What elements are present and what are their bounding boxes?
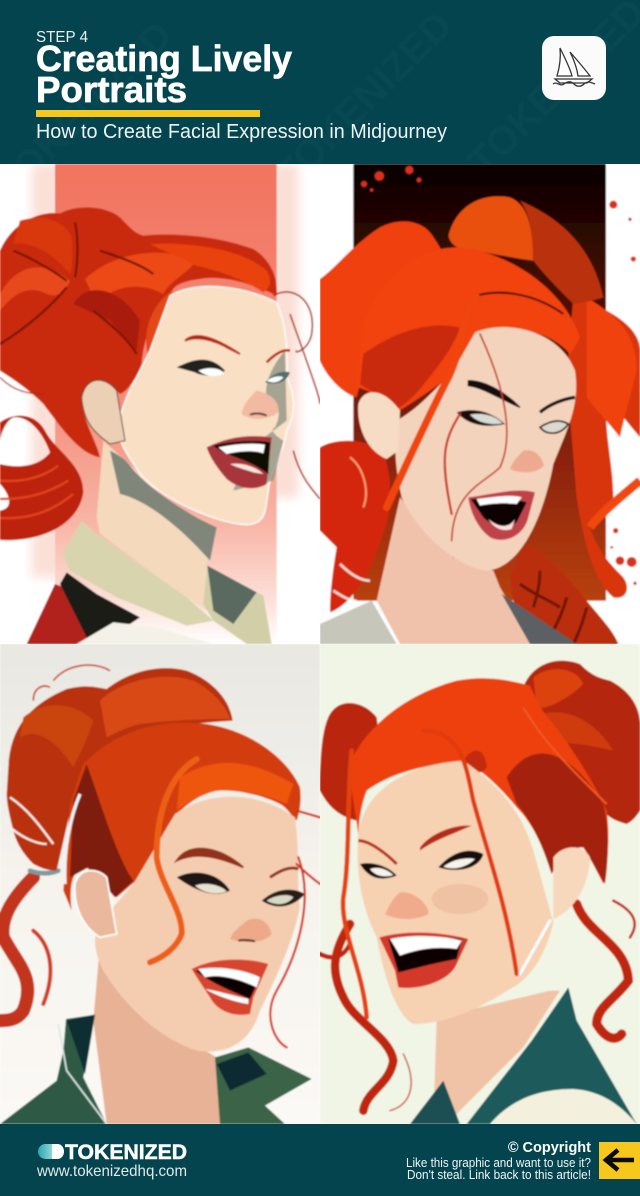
hair strands [343, 731, 550, 1017]
subtitle: How to Create Facial Expression in Midjourney [36, 121, 447, 143]
face features: brows, eyes, nose, mouth [177, 849, 305, 1015]
neck [433, 991, 560, 1124]
ear [75, 871, 117, 937]
hair buns [320, 661, 640, 824]
back hair bun [0, 207, 320, 501]
portrait panel: top-right, orange hair on dark panel [320, 164, 640, 644]
face [117, 286, 294, 525]
face [358, 761, 553, 1024]
copyright notice: Don't steal. Link back to this article! [407, 1168, 591, 1182]
face [395, 327, 576, 571]
icon: Midjourney sailboat tile [542, 36, 606, 100]
curls [320, 901, 635, 1111]
main hair [62, 722, 302, 910]
title [36, 38, 292, 110]
copyright notice: Like this graphic and want to use it? [406, 1156, 591, 1170]
portrait panel: top-left, profile with red bun on salmon band [0, 164, 320, 644]
neck and shirt [320, 497, 577, 644]
main hair [348, 678, 608, 884]
neck [92, 960, 221, 1124]
website url: www.tokenizedhq.com [36, 1163, 187, 1180]
hair buns [7, 665, 233, 871]
title: Portraits [36, 69, 187, 110]
ear [358, 392, 400, 459]
footer band [0, 1124, 640, 1196]
step label: STEP 4 [36, 29, 88, 46]
ponytail strand [0, 871, 58, 1021]
header watermark: TOKENIZED [267, 3, 461, 197]
Tokenized logo: TOKENIZED [65, 1141, 187, 1164]
copyright notice: © Copyright [508, 1140, 591, 1156]
face features: brows, eyes, nose, freckles, mouth [358, 825, 488, 988]
hair loop ponytail [0, 377, 83, 540]
hair strands [150, 759, 320, 1047]
face [95, 797, 300, 1052]
portrait panel: bottom-left, bun and green collar [0, 644, 320, 1124]
title: Creating Lively [36, 38, 292, 79]
neck [97, 441, 217, 611]
face features: brows, eyes, nose, mouth [457, 381, 575, 540]
header band [0, 0, 640, 164]
teal jacket and white shirt [410, 987, 637, 1124]
arrow button [599, 1142, 640, 1179]
ear [553, 847, 590, 919]
rear hair and lower braids [320, 296, 640, 644]
yellow accent bar [36, 110, 260, 117]
ear [82, 380, 125, 444]
collar and vest [27, 521, 272, 644]
face features: brows, eyes, nose, mouth [177, 336, 290, 488]
hair buns and crown [320, 196, 603, 412]
copyright notice [406, 1140, 591, 1182]
portrait panel: bottom-right, twin buns and teal jacket [320, 644, 640, 1124]
loose hair strands [387, 297, 507, 541]
header watermark [0, 0, 640, 207]
paint splatter [361, 166, 637, 585]
green jacket [0, 1015, 312, 1124]
